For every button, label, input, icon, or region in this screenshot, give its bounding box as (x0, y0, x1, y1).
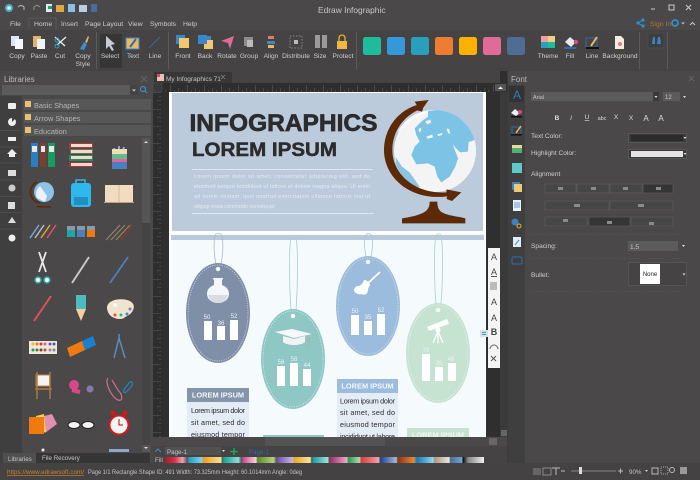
font selectors: Arial (533, 95, 544, 101)
bar chart: telescope: 35 (436, 361, 443, 367)
spacing: 1.5 (630, 244, 639, 251)
floating text toolbar (480, 248, 504, 368)
panel: lower section (171, 233, 485, 442)
icon: crayon (76, 295, 86, 321)
panel: libraries (0, 71, 153, 463)
library section headers: Basic Shapes (34, 101, 79, 110)
arrange group: Distribute (282, 53, 310, 60)
text style buttons: X (614, 114, 619, 121)
bar chart: flask: 36 (218, 321, 225, 327)
icon: backpack (71, 180, 91, 207)
title: INFOGRAPHICS (190, 110, 378, 137)
text style buttons: abc (598, 116, 607, 122)
bar chart: guitar: 35 (365, 315, 372, 321)
libraries tabs: Libraries (8, 456, 32, 463)
arrange group: Size (314, 53, 327, 60)
partial icons (42, 448, 129, 452)
floating text toolbar: A (491, 267, 497, 277)
floating text toolbar: A (491, 297, 497, 307)
libraries tabs: File Recovery (42, 455, 81, 462)
intro paragraph: Lorem ipsum dolor sit amet, consectetur adipiscing elit, sed do (194, 174, 370, 180)
page tabs row (153, 446, 507, 464)
tools group (101, 36, 162, 60)
font heading: Font (511, 75, 528, 84)
icon: palette (107, 299, 134, 319)
arrange group: Align (264, 53, 279, 60)
website link: https://www.edrawsoft.com/ (7, 469, 84, 476)
clipboard group: Copy (75, 53, 91, 60)
canvas scrollbars (153, 92, 507, 446)
property tabs (508, 85, 525, 463)
sign in and settings: Sign In (650, 21, 671, 28)
highlight color (531, 150, 686, 158)
floating text toolbar: B (491, 327, 498, 337)
intro paragraph: eiusmod tempor incididunt ut labore et dolore magna aliqua. Ut enim (194, 184, 370, 190)
icon: pencils (30, 225, 56, 238)
card: first (187, 388, 249, 442)
icon: alarm clock (110, 410, 128, 434)
canvas (153, 71, 507, 464)
icon: blue pen (110, 257, 128, 283)
bar chart: telescope: 46 (448, 357, 455, 363)
panel: header band (172, 93, 483, 231)
property tabs: A (513, 88, 521, 102)
text style buttons: U (585, 114, 590, 121)
icon: stacked books (69, 143, 93, 167)
card: first: eiusmod tempor (191, 430, 246, 439)
icon: guitar (354, 272, 380, 295)
card: first: sit amet, sed do (191, 418, 245, 427)
spacing: Spacing: (531, 243, 557, 250)
subtitle: LOREM IPSUM (192, 139, 337, 161)
tools group: Select (101, 53, 119, 60)
bar chart: flask (204, 314, 238, 340)
tag: graduation cap (261, 236, 325, 409)
bar chart: guitar: 50 (352, 309, 359, 315)
icon: telescope (427, 319, 449, 343)
theme tools: Background (602, 53, 638, 60)
intro paragraph: ad minim veniam, quis nostrud exercitation ullamco laboris nisi ut (194, 194, 370, 200)
bar chart: graduation cap (277, 357, 311, 386)
floating text toolbar: A (491, 252, 497, 262)
card: third (337, 379, 398, 441)
bar chart: guitar (351, 308, 385, 335)
icon: push pins (69, 380, 94, 392)
icon: flask (207, 278, 229, 303)
panel: infographic page (169, 92, 486, 442)
font selectors: 12 (665, 95, 672, 101)
rulers (153, 83, 506, 437)
icon: open book (104, 185, 134, 203)
document tab: My Infographics 71 (166, 76, 221, 83)
text style buttons: I (570, 115, 572, 122)
tag: flask (186, 233, 250, 363)
ribbon (0, 30, 700, 71)
clipboard group: Style (76, 61, 91, 68)
page tabs row: Page-1 (249, 449, 270, 456)
bar chart: telescope (422, 348, 456, 381)
icon: glasses (68, 422, 94, 428)
view controls (533, 467, 687, 476)
window controls (651, 5, 691, 10)
clipboard group: Copy (9, 53, 25, 60)
bullet: Bullet: (531, 272, 549, 279)
library scrollbar (142, 138, 150, 455)
text style buttons: A (643, 114, 649, 123)
libraries heading: Libraries (4, 75, 35, 84)
icon: scissors (35, 252, 50, 283)
tag: telescope (406, 234, 470, 403)
shape status: Page 1/1 Rectangle Shape ID: 491 Width: 73.325mm Height: 60.1014mm Angle: 0deg (88, 469, 302, 476)
card: fourth: LOREM IPSUM (412, 430, 464, 440)
bullet (531, 262, 686, 286)
menu tabs (10, 18, 197, 30)
font selectors (531, 92, 686, 101)
arrange group: Rotate (217, 53, 237, 60)
icon: easel (35, 372, 52, 399)
library section headers: Education (34, 127, 67, 136)
text style buttons: X (629, 115, 634, 122)
quick access toolbar (5, 4, 97, 12)
bullet: None (643, 272, 658, 278)
category icons (0, 96, 22, 463)
clipboard group: Paste (31, 53, 48, 60)
document tab (154, 72, 232, 83)
tools group: Text (127, 53, 139, 60)
card: second (263, 435, 324, 437)
icon: paper clips (107, 378, 132, 400)
icon: brushes (106, 224, 133, 240)
card: third: Lorem ipsum dolor (340, 396, 396, 406)
library section headers: Arrow Shapes (34, 114, 81, 123)
spacing (531, 241, 685, 251)
icon: compass (114, 334, 125, 358)
theme tools: Line (586, 53, 599, 60)
icon: pencil cup (112, 146, 127, 169)
card: third: eiusmod tempor (340, 420, 396, 429)
bar chart: guitar: 52 (378, 308, 385, 314)
text color (531, 133, 686, 142)
view controls: 90% (629, 469, 642, 476)
tag: guitar (336, 234, 400, 356)
clipboard group (9, 36, 91, 68)
bar chart: flask: 52 (231, 314, 238, 320)
bar chart: graduation cap: 58 (278, 360, 285, 366)
menu tabs: View (128, 21, 143, 28)
icon: paper stack (29, 414, 57, 434)
library section headers (24, 99, 151, 136)
tools group: Line (149, 53, 162, 60)
text color: Text Color: (531, 133, 563, 140)
arrange group (175, 35, 354, 60)
theme tools (538, 33, 664, 60)
icon: binders (31, 143, 55, 167)
bar chart: graduation cap: 44 (304, 363, 311, 369)
libraries tabs (3, 453, 150, 463)
card: fourth (407, 428, 469, 437)
page tabs row: Page-1 (167, 449, 188, 456)
icon: watercolor box (29, 341, 57, 354)
card: third: incididunt ut labore (340, 432, 395, 441)
theme tools: Fill (566, 53, 575, 60)
menu tabs: Help (183, 21, 197, 28)
card: third: sit amet, sed do (340, 408, 395, 417)
bar chart: flask: 50 (204, 315, 211, 321)
sign in and settings (636, 18, 695, 28)
floating text toolbar: A (491, 313, 497, 323)
icon: desk globe (384, 100, 477, 223)
card: first: Lorem ipsum dolor (191, 406, 246, 415)
intro paragraph: aliquip exea commodo consequat (194, 204, 275, 210)
text style buttons (555, 114, 664, 123)
text style buttons: A (658, 114, 664, 123)
highlight color: Highlight Color: (531, 150, 576, 157)
menu tabs: Insert (61, 21, 78, 28)
clipboard group: Cut (55, 53, 65, 60)
alignment (531, 171, 673, 226)
bar chart: telescope: 70 (423, 348, 430, 354)
icon: red pencil (34, 296, 51, 321)
menu tabs: File (10, 21, 21, 28)
card: third: LOREM IPSUM (341, 382, 394, 390)
intro paragraph (194, 174, 370, 210)
icon: globe (30, 182, 54, 208)
bar chart: graduation cap: 58 (291, 357, 298, 363)
menu tabs: Home (34, 21, 52, 28)
color palette (155, 457, 484, 464)
arrange group: Back (198, 53, 213, 60)
arrange group: Group (240, 53, 258, 60)
icon: fountain pen (72, 257, 89, 283)
icon: eraser (67, 336, 96, 357)
arrange group: Front (175, 53, 191, 60)
alignment: Alignment (531, 171, 560, 178)
menu tabs: Symbols (150, 21, 177, 28)
theme tools: Theme (538, 53, 559, 60)
library search (2, 85, 147, 95)
arrange group: Protect (333, 53, 354, 60)
icon: paint jars (67, 226, 95, 237)
card: first: LOREM IPSUM (192, 390, 244, 400)
status bar (0, 463, 700, 480)
window title: Edraw Infographic (318, 5, 386, 15)
text style buttons: B (555, 115, 560, 122)
icon: graduation cap (275, 329, 312, 345)
color palette: Fill (155, 457, 163, 464)
style swatches (363, 37, 525, 55)
panel: font properties (507, 71, 700, 463)
menu tabs: Page Layout (85, 21, 123, 28)
